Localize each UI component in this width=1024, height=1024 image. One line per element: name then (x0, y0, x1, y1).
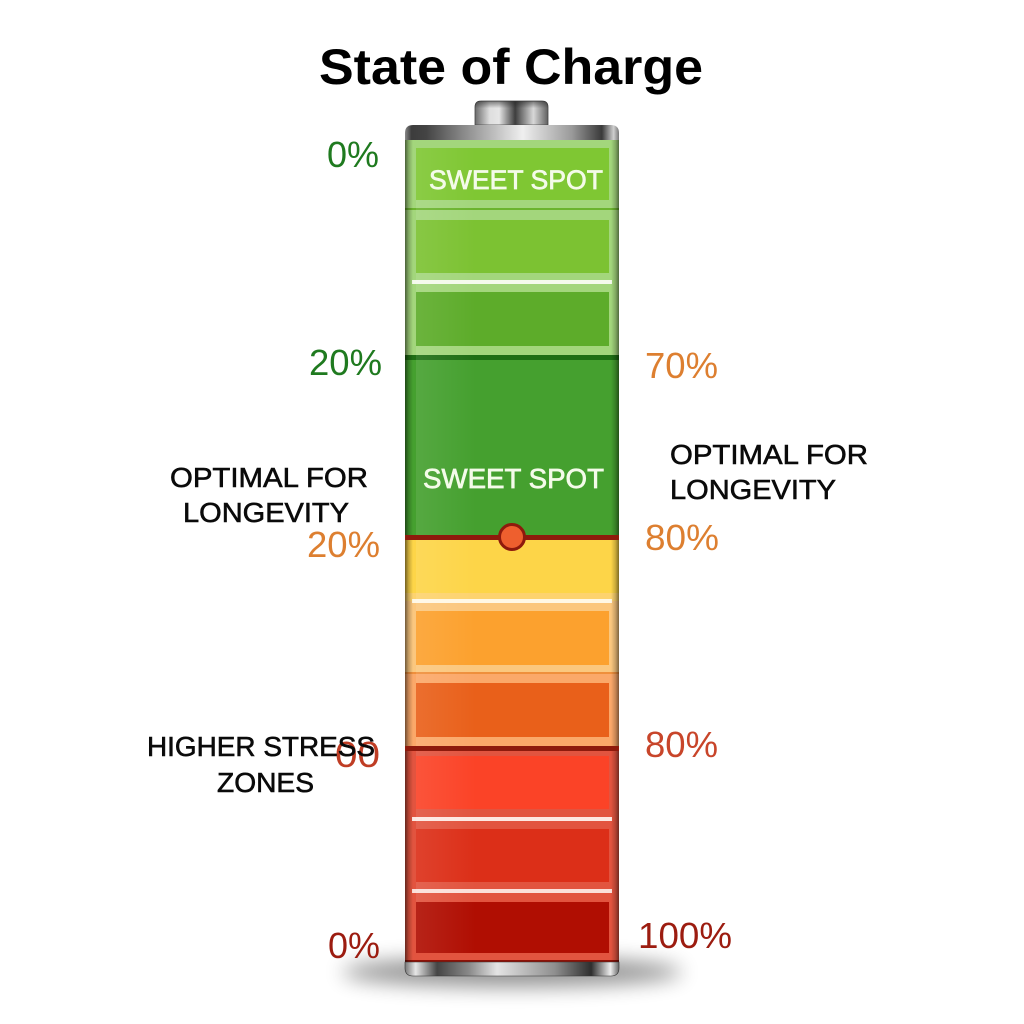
left 0% top: 0% (327, 134, 379, 175)
left callout: higher stress zones (147, 731, 375, 798)
left callout: optimal for longevity (170, 462, 368, 528)
label: sweet spot middle: SWEET SPOT (423, 463, 604, 494)
title: State of Charge (319, 39, 703, 95)
right edge shading (611, 138, 619, 963)
green transition line (405, 355, 619, 360)
left callout: optimal for longevity: LONGEVITY (183, 497, 349, 528)
right callout: optimal for longevity (670, 439, 868, 505)
bottom cap (405, 962, 619, 976)
divider: 20/70 (405, 535, 619, 540)
left edge shading (405, 138, 413, 963)
left callout: higher stress zones: ZONES (217, 767, 314, 798)
battery shadow (342, 957, 682, 987)
right callout: optimal for longevity: LONGEVITY (670, 474, 836, 505)
right 100%: 100% (638, 915, 732, 956)
right 70%: 70% (645, 345, 718, 386)
marker dot (500, 524, 524, 550)
zone: green upper (405, 138, 619, 356)
label: sweet spot top: SWEET SPOT (429, 165, 603, 195)
battery terminal (475, 101, 548, 125)
right 80% orange: 80% (645, 517, 719, 558)
battery (342, 101, 682, 987)
divider: 80 (405, 746, 619, 751)
right 80% red: 80% (645, 724, 718, 765)
left callout: higher stress zones: HIGHER STRESS (147, 731, 375, 762)
left clipped 00: 00 (335, 734, 380, 775)
zone: sweet spot (405, 356, 619, 536)
top cap (405, 125, 619, 140)
left 20% green: 20% (309, 342, 382, 383)
left callout: optimal for longevity: OPTIMAL FOR (170, 462, 368, 493)
cell sheen (416, 148, 476, 953)
left 20% orange: 20% (307, 524, 380, 565)
zone: yellow and orange (405, 538, 619, 748)
left 0% bottom: 0% (328, 925, 380, 966)
zone: red (405, 749, 619, 963)
right callout: optimal for longevity: OPTIMAL FOR (670, 439, 868, 470)
